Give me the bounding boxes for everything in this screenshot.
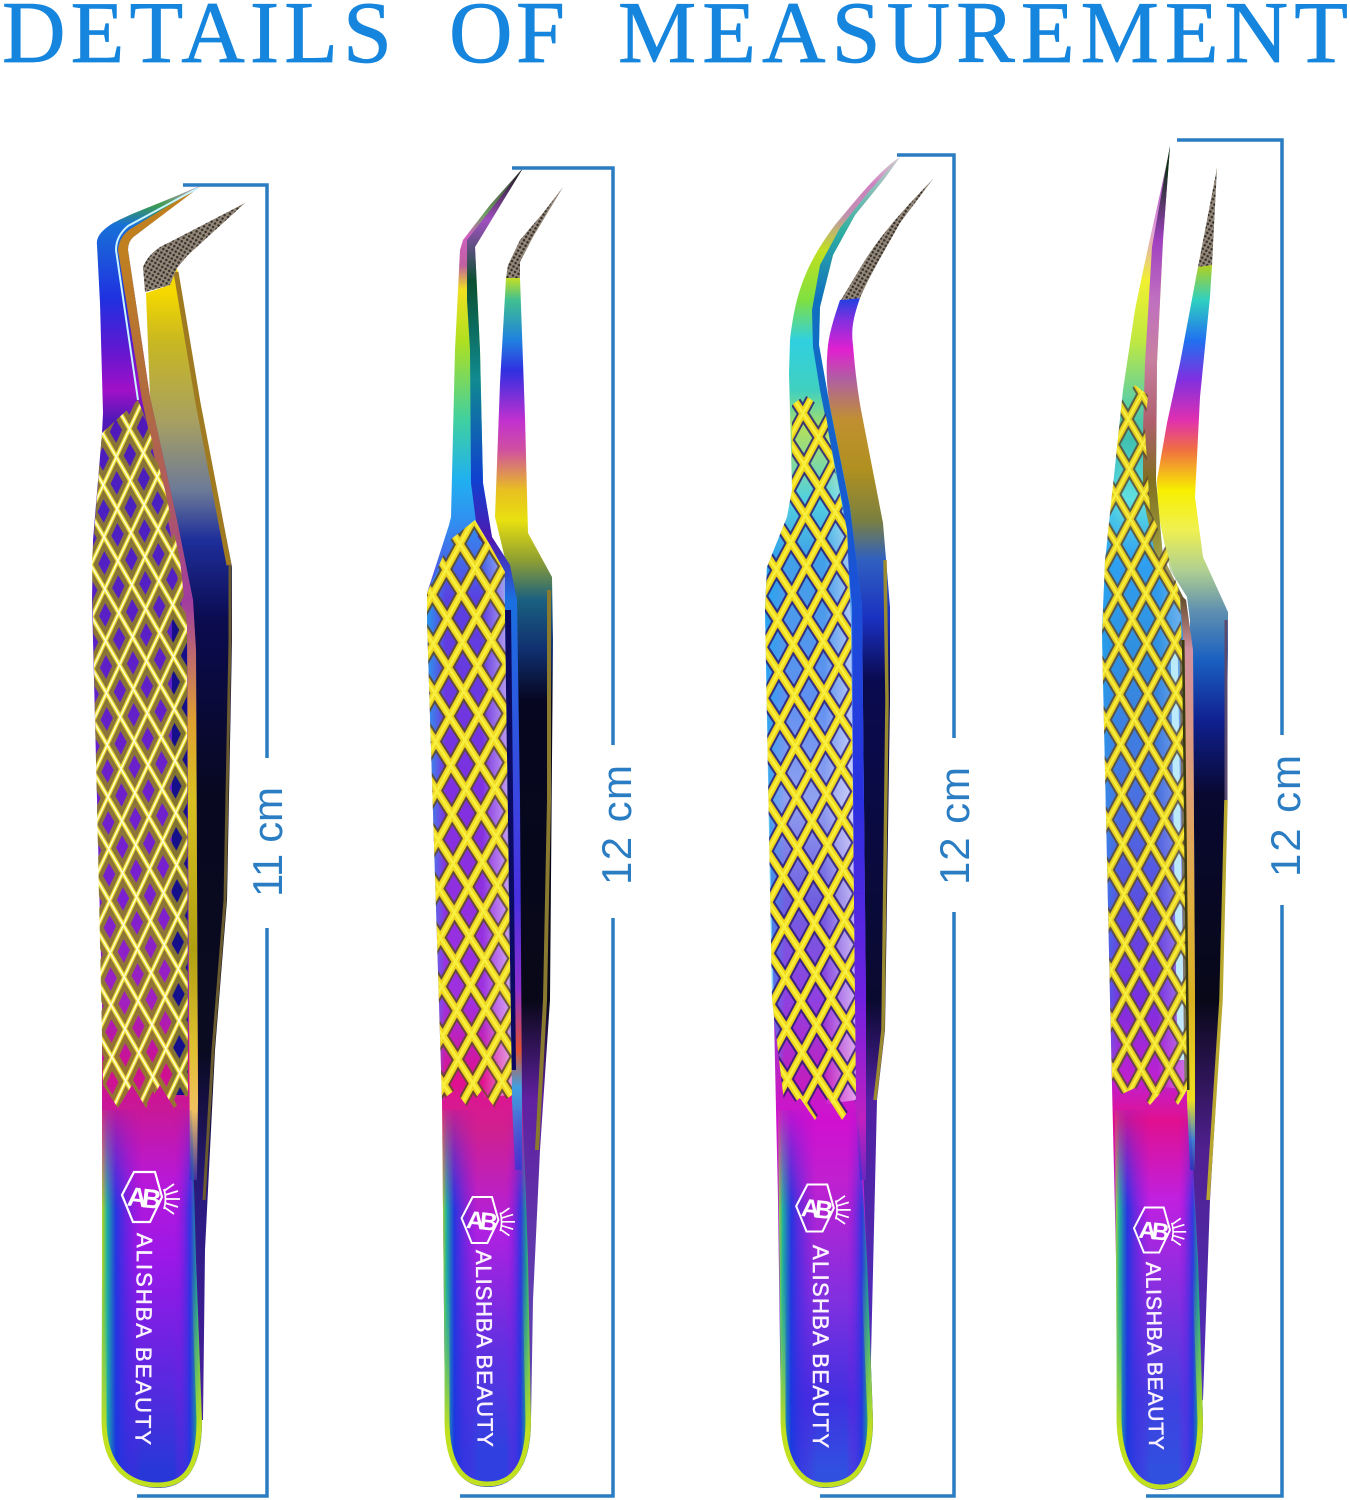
- handle sheen 3: [778, 1110, 873, 1488]
- back arm 1 lower rim: [204, 565, 230, 1200]
- logo 2: [462, 1197, 515, 1243]
- serrated tip 3: [841, 179, 933, 300]
- grip colour shift 3: [765, 395, 856, 1110]
- front arm side band 3: [812, 157, 900, 1180]
- tweezer 1: angled tip: [92, 185, 245, 1488]
- handle side shadow 1: [172, 600, 188, 1095]
- front arm and handle 1: [92, 185, 202, 1488]
- dimension bracket: 11 cm: 11 cm: [244, 787, 291, 897]
- back arm 4: [1157, 265, 1228, 1400]
- lattice grip 1: [92, 400, 188, 1108]
- handle rim 3: [783, 1270, 870, 1485]
- handle sheen 4: [1115, 1110, 1203, 1490]
- brand name 1: ALISHBA BEAUTY: [131, 1233, 157, 1445]
- logo 3: AB: [800, 1194, 834, 1225]
- back arm 1: [146, 268, 232, 1420]
- dimension bracket: 12 cm (third): 12 cm: [931, 767, 978, 885]
- lattice grip 3: [765, 395, 856, 1120]
- dimension bracket: 11 cm: [137, 185, 291, 1496]
- logo 1: AB: [126, 1182, 162, 1215]
- dimension bracket: 12 cm (second): [460, 168, 640, 1496]
- back arm 4 upper rim: [1224, 620, 1228, 800]
- dimension bracket: 12 cm (fourth): 12 cm: [1262, 755, 1309, 877]
- handle rim 2: [447, 1270, 528, 1484]
- serrated tip 4: [1198, 168, 1217, 267]
- logo 1: [122, 1172, 180, 1222]
- handle rim 4: [1119, 1270, 1200, 1487]
- front arm side band 1: [118, 186, 201, 1180]
- front arm and handle 2: [427, 168, 531, 1487]
- tweezer 4: straight tip: [1102, 146, 1228, 1490]
- tweezer 2: L-curve tip: [427, 168, 563, 1487]
- back arm 2 rim: [537, 590, 549, 1150]
- lattice grip 4: [1102, 385, 1187, 1105]
- logo 2: AB: [465, 1207, 498, 1237]
- handle sheen 2: [442, 1110, 531, 1487]
- brand name 3: ALISHBA BEAUTY: [808, 1245, 833, 1448]
- front arm side band 4: [1143, 146, 1195, 1170]
- title: [2, 0, 1348, 82]
- tweezer 3: curved tip: [765, 157, 933, 1488]
- navy strip 2: [508, 610, 513, 1070]
- dimension bracket: 12 cm (fourth): [1146, 140, 1309, 1496]
- logo 4: AB: [1137, 1217, 1170, 1247]
- dimension bracket: 12 cm (third): [820, 155, 978, 1496]
- front arm and handle 3: [765, 157, 900, 1488]
- back arm 4 lower rim: [1208, 800, 1226, 1200]
- pale strip 4: [1174, 640, 1181, 1060]
- back arm 3: [827, 298, 890, 1400]
- back arm 2: [495, 278, 553, 1420]
- back arm 3 rim: [875, 560, 887, 1100]
- dark strip 4: [1182, 640, 1187, 1090]
- white slit 1: [116, 188, 198, 400]
- serrated tip 1: [143, 203, 245, 292]
- brand name 4: ALISHBA BEAUTY: [1141, 1262, 1167, 1450]
- dimension bracket: 12 cm (second): 12 cm: [593, 765, 640, 885]
- grip colour shift 2: [427, 520, 512, 1100]
- lattice grip 2: [427, 520, 512, 1108]
- front arm side band 2: [467, 168, 523, 1170]
- grip colour shift 4: [1102, 385, 1187, 1090]
- back arm 1 rim: [176, 272, 229, 565]
- front arm and handle 4: [1102, 146, 1203, 1490]
- serrated tip 2: [506, 187, 563, 278]
- logo 3: [796, 1184, 851, 1232]
- handle sheen 1: [102, 1110, 202, 1488]
- logo 4: [1134, 1208, 1186, 1252]
- handle rim 1: [104, 1270, 199, 1485]
- brand name 2: ALISHBA BEAUTY: [471, 1250, 498, 1447]
